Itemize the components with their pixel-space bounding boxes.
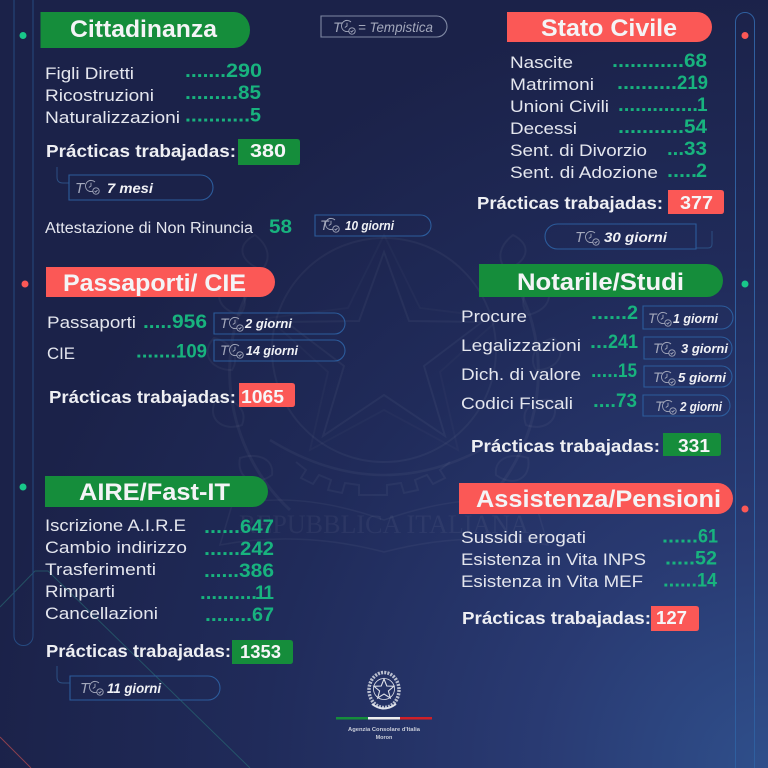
rows: Cambio indirizzo xyxy=(45,538,187,557)
timing: 30 giorni: T xyxy=(575,229,586,246)
timing: 3 giorni: 3 giorni xyxy=(681,342,729,356)
rows: 15 xyxy=(618,361,637,382)
rows: ...... xyxy=(663,570,697,592)
timing: 5 giorni: T xyxy=(653,369,663,385)
rows: ..... xyxy=(591,361,618,382)
heading: AIRE/Fast-IT: AIRE/Fast-IT xyxy=(79,479,230,506)
rows: 54 xyxy=(684,117,707,138)
total: Assistenza: Prácticas trabajadas: xyxy=(462,608,651,628)
rows: ...... xyxy=(204,561,239,582)
left rail xyxy=(14,0,33,646)
rows: ...... xyxy=(662,526,698,548)
rows: ......... xyxy=(185,83,238,104)
rows: 5 xyxy=(250,106,261,126)
rows: 14 xyxy=(697,570,717,592)
panel: Stato Civile xyxy=(477,12,724,249)
timing: 11 giorni: 11 giorni xyxy=(107,680,162,696)
timing: 11 giorni: T xyxy=(80,680,91,697)
timing: 10 giorni: 10 giorni xyxy=(345,219,394,233)
rows: Codici Fiscali xyxy=(461,394,573,413)
rows: ...... xyxy=(591,303,627,324)
rows: ............ xyxy=(612,51,684,72)
rows: 11 xyxy=(255,583,274,604)
rows: Trasferimenti xyxy=(45,560,156,579)
timing: 2 giorni: 2 giorni xyxy=(679,400,722,414)
rows: 33 xyxy=(684,139,707,160)
heading: Passaporti/ CIE xyxy=(46,267,275,297)
total: Notarile: Prácticas trabajadas: xyxy=(471,436,660,456)
rows: ....... xyxy=(185,61,226,82)
rows: 242 xyxy=(240,539,274,560)
rows: 241 xyxy=(608,332,638,353)
total: AIRE: 1353 xyxy=(240,641,281,662)
rows xyxy=(45,61,262,127)
heading: Cittadinanza: Cittadinanza xyxy=(70,16,218,43)
rows xyxy=(47,312,207,363)
total: Assistenza xyxy=(462,606,699,631)
timing: 14 giorni: T xyxy=(220,342,230,358)
heading: Notarile/Studi xyxy=(479,264,723,297)
panel: Passaporti / CIE xyxy=(46,267,345,407)
rows: Passaporti xyxy=(47,313,136,332)
rows: Sent. di Divorzio xyxy=(510,141,647,160)
rows: ........ xyxy=(205,605,252,626)
total: Cittadinanza xyxy=(46,139,300,165)
timing: 2 giorni: T xyxy=(220,315,230,331)
total: Cittadinanza: Prácticas trabajadas: xyxy=(46,141,236,161)
rows: 67 xyxy=(252,605,274,626)
rows: .......... xyxy=(200,583,257,604)
rows: Procure xyxy=(461,307,527,326)
decorative diagonal lines xyxy=(0,571,250,768)
panel: AIRE / Fast-IT xyxy=(45,476,293,700)
rows xyxy=(510,51,708,182)
rows: 52 xyxy=(695,548,717,570)
rows: ....... xyxy=(136,342,176,362)
total: AIRE xyxy=(46,640,293,664)
rows: Unioni Civili xyxy=(510,97,609,116)
icon: Italian emblem xyxy=(369,672,399,708)
rows xyxy=(45,516,274,626)
rows: 386 xyxy=(239,561,274,582)
rows: Matrimoni xyxy=(510,75,594,94)
rows: ... xyxy=(590,332,608,353)
rows: 2 xyxy=(627,303,638,324)
right rail xyxy=(736,12,754,768)
rows: ...... xyxy=(204,539,240,560)
rows: ... xyxy=(667,139,684,160)
total: Passaporti: Prácticas trabajadas: xyxy=(49,387,236,407)
heading: Cittadinanza xyxy=(40,12,250,48)
total: Cittadinanza: 380 xyxy=(250,140,286,161)
heading: Stato Civile xyxy=(507,12,712,42)
timing: 2 giorni: T xyxy=(655,398,665,414)
rows: CIE xyxy=(47,344,75,363)
row: Attestazione di Non Rinuncia: 58 xyxy=(269,217,292,238)
timing: 2 giorni xyxy=(643,395,730,416)
rows: 85 xyxy=(238,83,261,104)
timing: 7 mesi xyxy=(57,167,213,200)
timing: 30 giorni xyxy=(545,224,712,249)
rows: 2 xyxy=(696,161,707,182)
watermark emblem xyxy=(208,235,560,552)
total: Stato Civile: 377 xyxy=(680,192,713,213)
rows: Naturalizzazioni xyxy=(45,108,180,127)
total: Stato Civile: Prácticas trabajadas: xyxy=(477,193,663,213)
timing: 11 giorni xyxy=(57,666,220,700)
timing: 7 mesi: 7 mesi xyxy=(107,180,154,196)
row: Attestazione di Non Rinuncia: Attestazione di Non Rinuncia xyxy=(45,220,253,237)
legend: tempistica: T xyxy=(333,19,343,35)
rows: 956 xyxy=(172,312,207,333)
heading: Stato Civile: Stato Civile xyxy=(541,15,677,42)
timing: 5 giorni xyxy=(644,366,732,387)
total: AIRE: Prácticas trabajadas: xyxy=(46,641,231,661)
rows: ..... xyxy=(667,161,697,182)
panel: Assistenza / Pensioni xyxy=(459,483,733,631)
timing: 14 giorni xyxy=(214,340,345,361)
rows: Figli Diretti xyxy=(45,64,134,83)
rows: Esistenza in Vita INPS xyxy=(461,550,646,569)
agency name: Moron xyxy=(376,735,393,741)
rows: Esistenza in Vita MEF xyxy=(461,572,643,591)
agency name: Agenzia Consolare d'Italia xyxy=(348,727,421,733)
tricolor line xyxy=(336,717,432,720)
rows: 109 xyxy=(176,342,207,362)
rows: Iscrizione A.I.R.E xyxy=(45,516,186,535)
total: Notarile: 331 xyxy=(678,435,710,456)
timing: 3 giorni xyxy=(644,337,732,359)
rows: ..... xyxy=(665,548,695,570)
total: Assistenza: 127 xyxy=(656,607,687,628)
rows: Cancellazioni xyxy=(45,604,158,623)
panel: Notarile / Studi xyxy=(461,264,733,456)
heading: Notarile/Studi: Notarile/Studi xyxy=(517,269,684,296)
footer: consular logo xyxy=(336,672,432,741)
panel: Cittadinanza xyxy=(40,12,431,238)
rows: .... xyxy=(593,391,616,412)
total: Notarile xyxy=(471,433,721,456)
watermark motto: REPUBBLICA ITALIANA xyxy=(239,510,529,539)
rows xyxy=(461,526,718,592)
rows: ...... xyxy=(204,517,240,538)
heading: Assistenza/Pensioni: Assistenza/Pensioni xyxy=(476,486,721,513)
total: Stato Civile xyxy=(477,190,724,214)
rows: 1 xyxy=(697,95,708,116)
timing: 1 giorni: 1 giorni xyxy=(673,312,719,326)
timing: 1 giorni xyxy=(643,306,733,329)
timing: 3 giorni: T xyxy=(653,340,663,356)
timing: 7 mesi: T xyxy=(75,180,86,197)
heading: AIRE/Fast-IT xyxy=(45,476,268,507)
timing: 2 giorni xyxy=(214,313,345,334)
rows: Sussidi erogati xyxy=(461,528,586,547)
rows: Nascite xyxy=(510,53,573,72)
rows: ..... xyxy=(143,312,172,333)
rows: Decessi xyxy=(510,119,577,138)
rows: 290 xyxy=(226,61,262,82)
rows xyxy=(461,303,638,413)
rows: Dich. di valore xyxy=(461,365,581,384)
rows: .......... xyxy=(617,73,677,94)
rows: Rimparti xyxy=(45,582,115,601)
rows: ........... xyxy=(185,106,250,126)
heading: Passaporti/ CIE: Passaporti/ CIE xyxy=(63,270,246,297)
row: Attestazione di Non Rinuncia xyxy=(45,217,292,238)
timing: 1 giorni: T xyxy=(648,310,658,326)
rows: 61 xyxy=(698,526,718,548)
timing: 14 giorni: 14 giorni xyxy=(246,344,299,358)
timing: 2 giorni: 2 giorni xyxy=(244,317,293,331)
timing: 10 giorni: T xyxy=(320,217,330,233)
agency name xyxy=(348,727,421,741)
rows: 219 xyxy=(677,73,708,94)
rows: Legalizzazioni xyxy=(461,336,581,355)
timing: 30 giorni: 30 giorni xyxy=(604,229,668,245)
legend: tempistica xyxy=(321,16,447,37)
rows: 73 xyxy=(616,391,637,412)
total: Passaporti xyxy=(49,383,295,407)
rows: .............. xyxy=(618,95,698,116)
rows: Sent. di Adozione xyxy=(510,163,658,182)
rows: Ricostruzioni xyxy=(45,86,154,105)
timing: 10 giorni xyxy=(315,215,431,236)
timing: 5 giorni: 5 giorni xyxy=(678,371,727,385)
rows: ........... xyxy=(618,117,684,138)
rows: 647 xyxy=(240,517,274,538)
total: Passaporti: 1065 xyxy=(241,386,284,407)
rows: 68 xyxy=(684,51,707,72)
legend: tempistica: = Tempistica xyxy=(358,19,433,35)
